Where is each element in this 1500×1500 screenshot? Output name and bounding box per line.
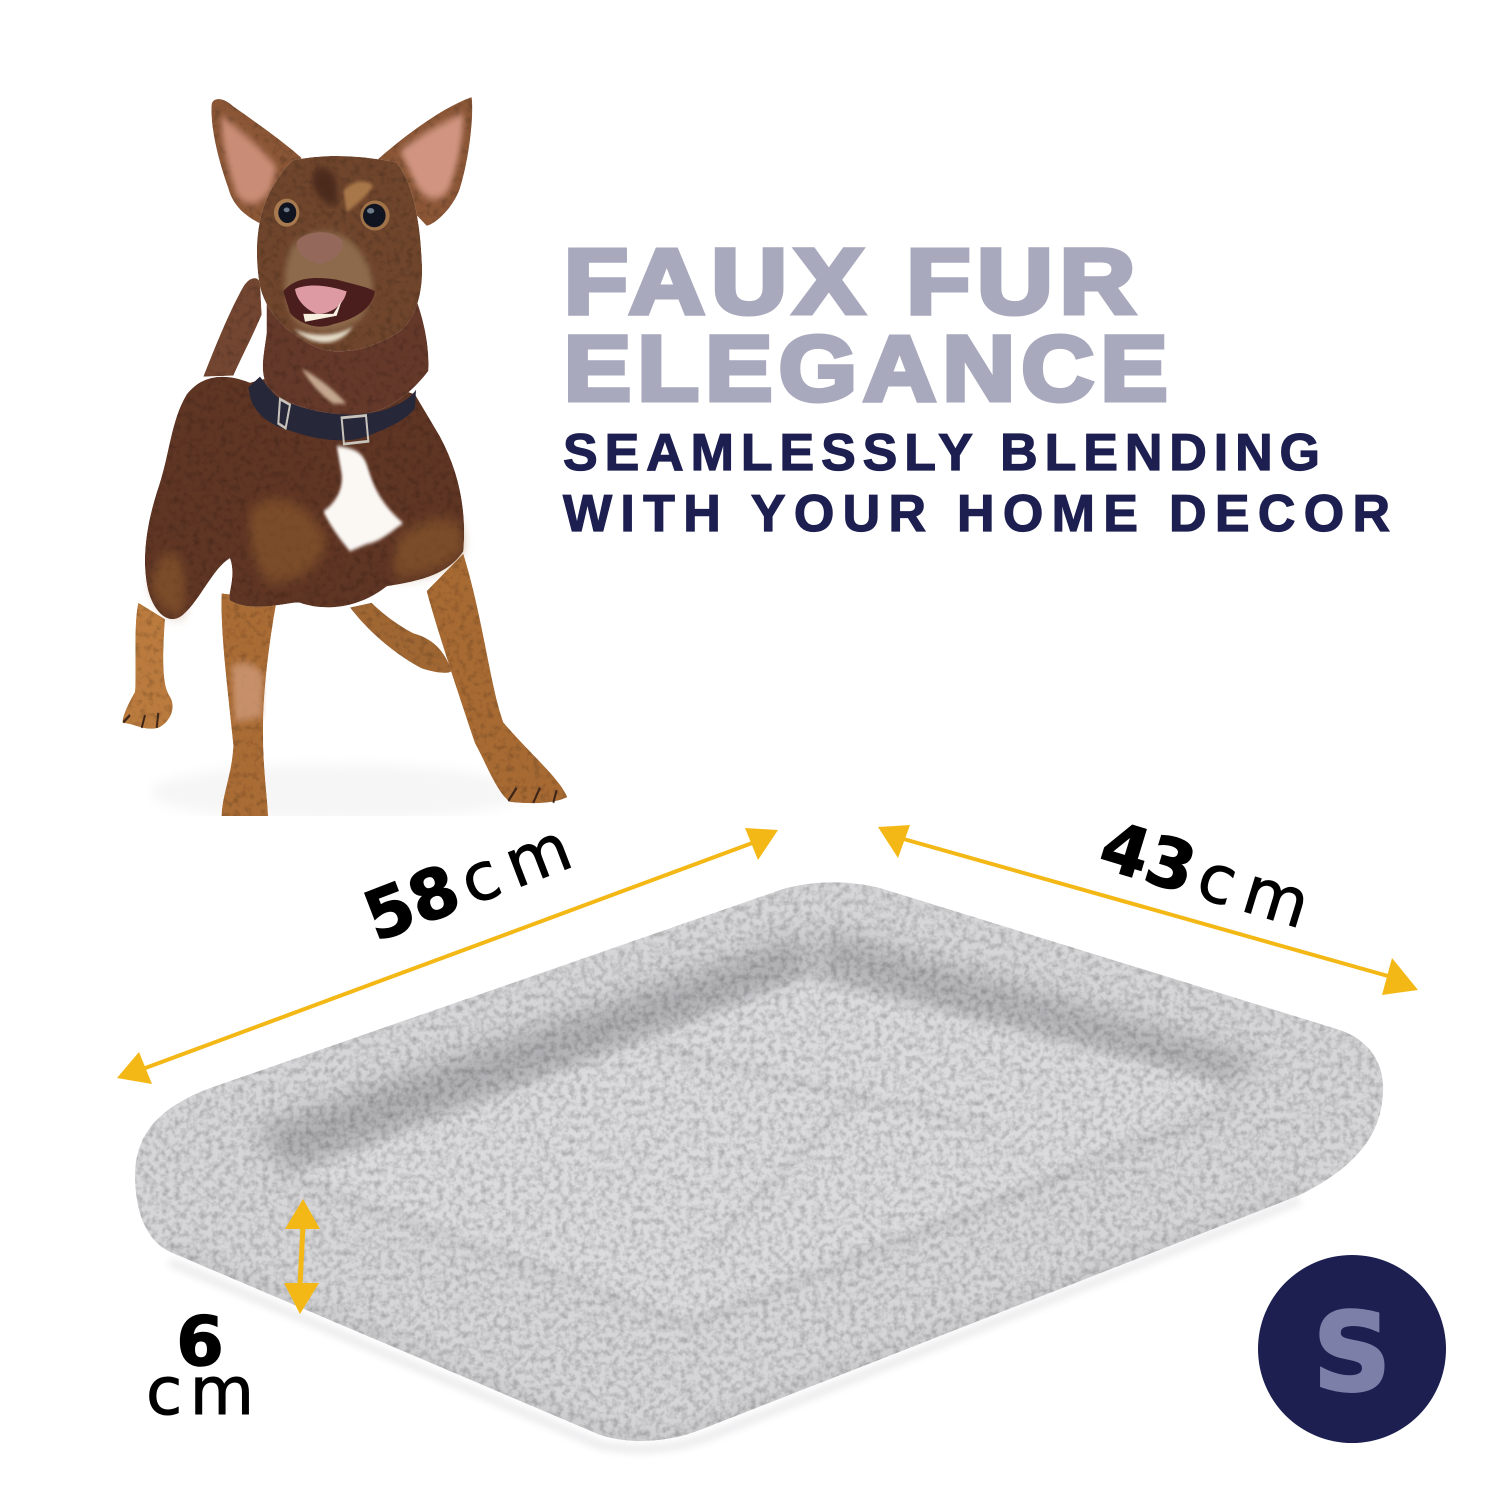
mouth <box>283 278 375 327</box>
label: 43 cm: 43 <box>1091 807 1205 910</box>
label: 6 cm <box>146 1303 254 1430</box>
body <box>145 375 464 619</box>
right eye <box>360 201 390 230</box>
label: 6 cm: 6 <box>176 1303 224 1382</box>
front leg pale patch <box>232 663 263 722</box>
subtitle: seamlessly blending with your home decor <box>563 424 1390 543</box>
back-right bolster inner wall <box>815 930 1265 1083</box>
left eye <box>274 199 299 227</box>
body highlights <box>150 499 463 615</box>
label: 43 cm: cm <box>1189 837 1318 944</box>
left ear <box>211 99 302 223</box>
bed soft shadow <box>170 1200 1300 1449</box>
bed body with fleece texture <box>135 882 1383 1441</box>
back-left bolster inner wall <box>255 935 810 1172</box>
collar buckles <box>278 399 368 444</box>
photo: small brown dog <box>123 97 567 825</box>
teeth <box>303 301 342 322</box>
label: 58 cm <box>354 807 582 958</box>
size badge: S <box>1258 1255 1446 1443</box>
front leg left <box>221 593 277 825</box>
arrow: 43 cm width <box>878 825 1418 995</box>
nose <box>297 232 343 264</box>
seat cushion <box>304 980 1217 1180</box>
bed outer bolster <box>135 882 1383 1441</box>
arrow: 58 cm length <box>117 828 778 1084</box>
photo: grey fleece pet bed <box>135 882 1383 1449</box>
collar <box>248 377 416 444</box>
tongue <box>295 285 347 314</box>
far back leg <box>350 603 452 673</box>
title line 1: FAUX FUR <box>564 231 1142 333</box>
subtitle line 1: SEAMLESSLY BLENDING <box>563 424 1320 482</box>
subtitle line 2: WITH YOUR HOME DECOR <box>563 485 1390 543</box>
left ear inner <box>221 116 277 204</box>
right ear inner <box>400 113 463 199</box>
neck blaze <box>302 369 347 404</box>
floor shadow <box>166 772 504 812</box>
label: 6 cm: cm <box>146 1353 254 1430</box>
label: 58 cm: 58 <box>354 850 470 958</box>
arrow: 6 cm height <box>284 1199 320 1314</box>
head <box>257 156 422 351</box>
neck <box>263 296 429 415</box>
white chest patch <box>323 446 403 551</box>
title line 2: ELEGANCE <box>564 318 1174 420</box>
toe claws <box>123 713 557 803</box>
tan brow spot <box>343 181 373 212</box>
right ear <box>377 97 472 226</box>
front leg right and paw <box>427 554 567 803</box>
cushion quilting seams <box>660 1050 1000 1260</box>
brow markings <box>312 167 337 205</box>
near back leg and paw <box>123 603 173 729</box>
title: Faux Fur Elegance <box>564 231 1174 420</box>
front bolster shade lines <box>300 1105 1240 1325</box>
label: 43 cm <box>1091 807 1319 945</box>
muzzle <box>285 231 373 332</box>
tail <box>203 278 262 377</box>
size badge: S: S <box>1313 1291 1391 1416</box>
lower edge shading <box>170 1195 1300 1440</box>
chin <box>293 326 353 343</box>
label: 58 cm: cm <box>449 808 582 920</box>
